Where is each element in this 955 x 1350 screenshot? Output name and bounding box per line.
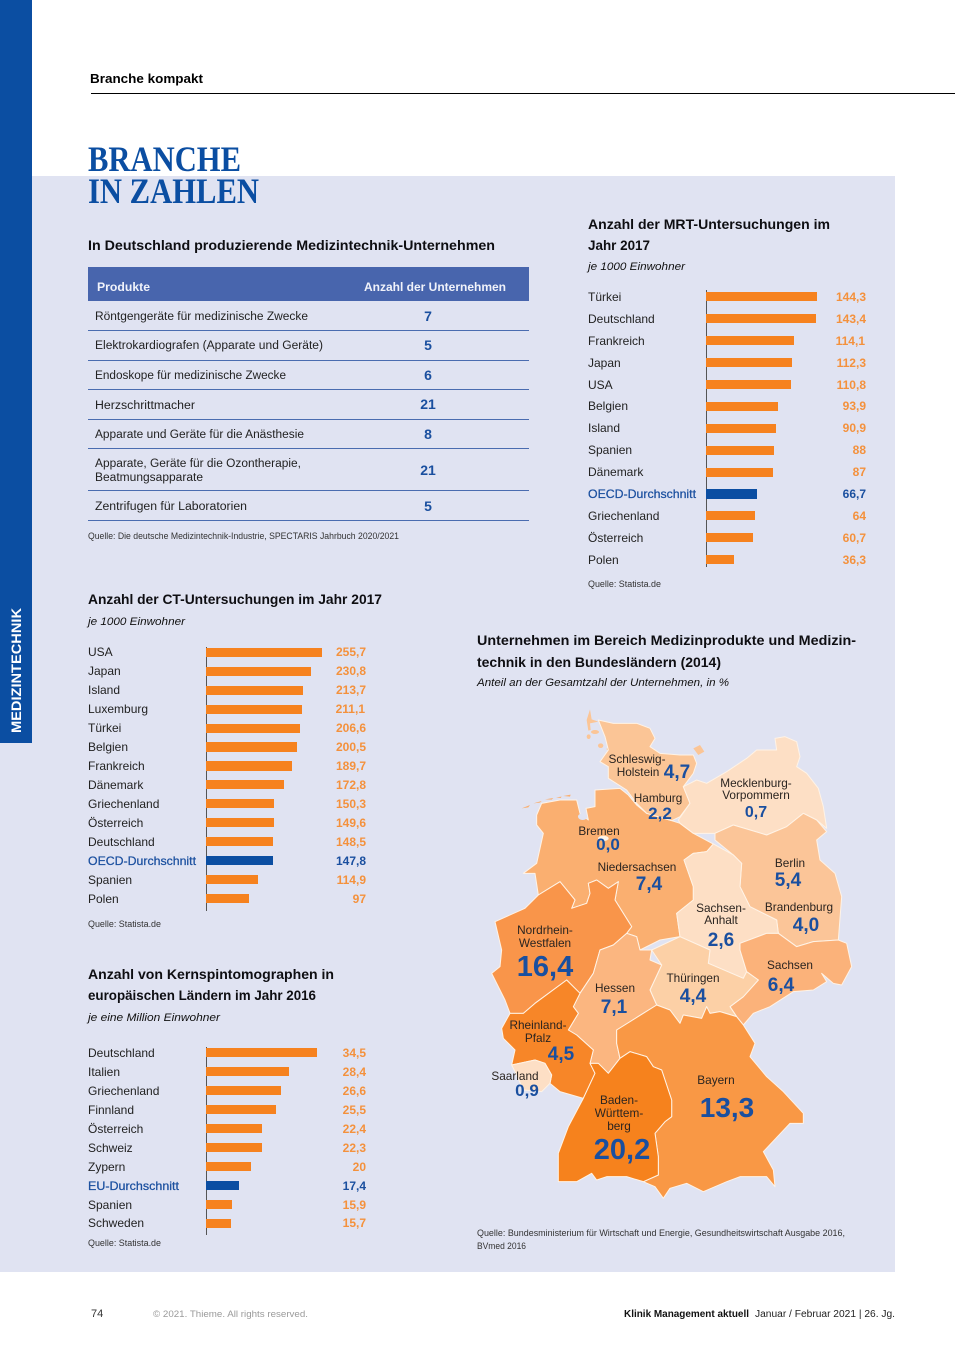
scanners heading: Anzahl von Kernspintomographen in xyxy=(88,966,334,982)
scanners bar chart: Österreich xyxy=(88,1122,143,1136)
MRT bar chart: 114,1 xyxy=(836,334,865,348)
MRT bar chart: OECD-Durchschnitt xyxy=(588,487,697,501)
scanners bar chart: Deutschland xyxy=(88,1046,155,1060)
CT bar chart xyxy=(88,645,366,911)
MRT bar chart xyxy=(588,290,866,567)
region: Nordrhein-Westfalen xyxy=(492,880,632,1013)
CT bar chart: Deutschland xyxy=(88,835,155,849)
MRT bar chart: 144,3 xyxy=(836,290,866,304)
CT bar chart: 172,8 xyxy=(336,778,366,792)
MRT bar chart: 90,9 xyxy=(843,421,866,435)
map labels: 16,4 xyxy=(517,951,573,983)
table header row xyxy=(88,267,529,301)
region: Baden-Württemberg xyxy=(558,1052,672,1182)
table rows: Beatmungsapparate xyxy=(95,472,203,484)
CT bar chart: 211,1 xyxy=(336,702,365,716)
map labels: Württem- xyxy=(595,1106,643,1120)
table rows: 21 xyxy=(420,462,436,478)
region: Rheinland-Pfalz xyxy=(502,980,595,1098)
map subtitle: Anteil an der Gesamtzahl der Unternehmen, in % xyxy=(476,677,729,689)
CT bar chart: 213,7 xyxy=(336,683,366,697)
map labels: 4,5 xyxy=(548,1044,575,1065)
region: Thüringen xyxy=(650,937,758,1023)
map source: Quelle: Bundesministerium für Wirtschaft und Energie, Gesundheitswirtschaft Ausgabe 2016, xyxy=(477,1228,845,1238)
map labels: Bremen xyxy=(578,824,620,838)
map labels: 7,4 xyxy=(636,874,663,895)
map labels: 4,0 xyxy=(793,915,819,936)
scanners heading xyxy=(88,966,334,1003)
title xyxy=(88,139,259,211)
scanners bar chart: 15,7 xyxy=(343,1216,366,1230)
CT bar chart: Island xyxy=(88,683,120,697)
islands xyxy=(522,709,704,808)
table source: Quelle: Die deutsche Medizintechnik-Industrie, SPECTARIS Jahrbuch 2020/2021 xyxy=(88,531,399,541)
CT bar chart: Türkei xyxy=(88,721,121,735)
table header row: Anzahl der Unternehmen xyxy=(364,280,506,294)
footer: Januar / Februar 2021 | 26. Jg. xyxy=(755,1309,895,1320)
MRT bar chart: 64 xyxy=(853,509,866,523)
CT bar chart: 147,8 xyxy=(336,854,366,868)
map labels: Nordrhein- xyxy=(517,923,573,937)
MRT bar chart: 87 xyxy=(853,465,866,479)
MRT bar chart: Polen xyxy=(588,553,619,567)
CT bar chart: 200,5 xyxy=(336,740,366,754)
scanners bar chart: 17,4 xyxy=(343,1179,366,1193)
MRT bar chart: Spanien xyxy=(588,443,632,457)
panel: MRT chart xyxy=(586,216,866,589)
scanners bar chart: 22,4 xyxy=(343,1122,366,1136)
scanners bar chart: EU-Durchschnitt xyxy=(88,1179,180,1193)
footer: 74 xyxy=(91,1308,103,1320)
map labels: Baden- xyxy=(600,1093,638,1107)
table heading: In Deutschland produzierende Medizintechnik-Unternehmen xyxy=(88,237,495,253)
MRT bar chart: Belgien xyxy=(588,399,628,413)
title: IN ZAHLEN xyxy=(88,171,259,211)
scanners bar chart: 15,9 xyxy=(343,1198,366,1212)
MRT bar chart: Japan xyxy=(588,356,621,370)
table rows: Endoskope für medizinische Zwecke xyxy=(95,370,286,382)
MRT heading: Anzahl der MRT-Untersuchungen im xyxy=(588,216,830,232)
map labels: 2,6 xyxy=(708,930,734,951)
map labels: 20,2 xyxy=(594,1134,650,1166)
map labels: 5,4 xyxy=(775,870,802,891)
region: Sachsen-Anhalt xyxy=(677,844,778,978)
scanners bar chart: 20 xyxy=(353,1160,366,1174)
map labels: Vorpommern xyxy=(722,788,790,802)
MRT bar chart: 112,3 xyxy=(837,356,866,370)
title: BRANCHE xyxy=(88,139,241,179)
map labels: Sachsen xyxy=(767,958,813,972)
background panel xyxy=(0,176,895,1272)
map labels: Anhalt xyxy=(704,913,738,927)
table rows: Zentrifugen für Laboratorien xyxy=(95,501,247,513)
region: Sachsen xyxy=(730,933,852,1025)
map labels: Saarland xyxy=(491,1069,539,1083)
panel: manufacturers table xyxy=(88,237,529,541)
panel: CT chart xyxy=(86,591,382,929)
scanners source: Quelle: Statista.de xyxy=(88,1238,161,1248)
MRT bar chart: 143,4 xyxy=(836,312,866,326)
map labels: berg xyxy=(607,1119,631,1133)
CT bar chart: 149,6 xyxy=(336,816,366,830)
MRT bar chart: Island xyxy=(588,421,620,435)
CT bar chart: Belgien xyxy=(88,740,128,754)
CT bar chart: Dänemark xyxy=(88,778,144,792)
map labels xyxy=(491,752,833,1166)
MRT bar chart: Türkei xyxy=(588,290,621,304)
CT bar chart: Frankreich xyxy=(88,759,145,773)
map labels: Hamburg xyxy=(634,791,682,805)
MRT bar chart: Dänemark xyxy=(588,465,644,479)
CT heading: Anzahl der CT-Untersuchungen im Jahr 2017 xyxy=(88,591,382,607)
table rows: Apparate, Geräte für die Ozontherapie, xyxy=(95,458,301,470)
map source: BVmed 2016 xyxy=(477,1241,526,1251)
map labels: Holstein xyxy=(617,765,659,779)
CT bar chart: 114,9 xyxy=(337,873,366,887)
MRT bar chart: 88 xyxy=(853,443,866,457)
map labels: Schleswig- xyxy=(608,752,666,766)
map labels: 4,4 xyxy=(680,986,707,1007)
scanners bar chart: Schweiz xyxy=(88,1141,133,1155)
CT subtitle: je 1000 Einwohner xyxy=(86,616,186,628)
CT bar chart: Luxemburg xyxy=(88,702,148,716)
scanners bar chart: Spanien xyxy=(88,1198,132,1212)
scanners bar chart xyxy=(88,1046,366,1235)
CT bar chart: Japan xyxy=(88,664,121,678)
region: Saarland xyxy=(512,1060,552,1092)
sidebar: Medizintechnik xyxy=(0,0,32,743)
MRT bar chart: 110,8 xyxy=(837,378,866,392)
scanners bar chart: Griechenland xyxy=(88,1084,159,1098)
CT bar chart: OECD-Durchschnitt xyxy=(88,854,197,868)
map source xyxy=(477,1228,845,1251)
MRT heading xyxy=(588,216,830,253)
MRT bar chart: Österreich xyxy=(588,531,643,545)
MRT bar chart: 66,7 xyxy=(843,487,866,501)
map heading xyxy=(477,632,856,670)
map labels: Pfalz xyxy=(525,1031,551,1045)
CT source: Quelle: Statista.de xyxy=(88,919,161,929)
region: Schleswig-Holstein xyxy=(598,720,697,821)
CT bar chart: 206,6 xyxy=(336,721,366,735)
choropleth map of Germany xyxy=(492,709,852,1198)
scanners heading: europäischen Ländern im Jahr 2016 xyxy=(88,987,316,1003)
water spots xyxy=(578,813,587,820)
table rows: 8 xyxy=(424,426,432,442)
region: Bayern xyxy=(617,1005,803,1198)
section header: Branche kompakt: Branche kompakt xyxy=(90,71,204,86)
CT bar chart: 97 xyxy=(353,892,366,906)
region: Mecklenburg-Vorpommern xyxy=(678,737,827,835)
map labels: 2,2 xyxy=(648,804,672,823)
scanners bar chart: Italien xyxy=(88,1065,120,1079)
map labels: Niedersachsen xyxy=(598,860,676,874)
map labels: Thüringen xyxy=(666,971,720,985)
table rows: 7 xyxy=(424,308,432,324)
MRT source: Quelle: Statista.de xyxy=(588,579,661,589)
MRT subtitle: je 1000 Einwohner xyxy=(586,261,686,273)
CT bar chart: Spanien xyxy=(88,873,132,887)
MRT heading: Jahr 2017 xyxy=(588,237,650,253)
panel: MR scanners chart xyxy=(86,966,366,1248)
map labels: 0,7 xyxy=(745,804,767,821)
table rows: 6 xyxy=(424,367,432,383)
scanners bar chart: Schweden xyxy=(88,1216,144,1230)
map heading: technik in den Bundesländern (2014) xyxy=(477,654,721,670)
map labels: Mecklenburg- xyxy=(720,776,792,790)
map heading: Unternehmen im Bereich Medizinprodukte und Medizin- xyxy=(477,632,856,648)
CT bar chart: 150,3 xyxy=(336,797,366,811)
map labels: Sachsen- xyxy=(696,901,746,915)
region: Niedersachsen xyxy=(523,788,713,950)
table rows: Apparate und Geräte für die Anästhesie xyxy=(95,429,304,441)
scanners bar chart: 25,5 xyxy=(343,1103,366,1117)
scanners bar chart: 34,5 xyxy=(343,1046,366,1060)
scanners bar chart: Zypern xyxy=(88,1160,125,1174)
map labels: Westfalen xyxy=(519,936,571,950)
CT bar chart: 148,5 xyxy=(336,835,366,849)
table header row: Produkte xyxy=(97,280,150,294)
MRT bar chart: Deutschland xyxy=(588,312,655,326)
table rows: 5 xyxy=(424,337,432,353)
scanners bar chart: 26,6 xyxy=(343,1084,366,1098)
map labels: Bayern xyxy=(697,1073,735,1087)
MRT bar chart: 93,9 xyxy=(843,399,866,413)
map labels: 4,7 xyxy=(664,762,690,783)
CT bar chart: 230,8 xyxy=(336,664,366,678)
table rows xyxy=(88,308,529,520)
MRT bar chart: USA xyxy=(588,378,613,392)
region: Brandenburg and Berlin xyxy=(715,813,842,947)
map labels: Rheinland- xyxy=(509,1018,567,1032)
MRT bar chart: Frankreich xyxy=(588,334,645,348)
CT bar chart: Österreich xyxy=(88,816,143,830)
map labels: Berlin xyxy=(775,856,805,870)
table rows: Herzschrittmacher xyxy=(95,400,195,412)
footer: Klinik Management aktuell xyxy=(624,1309,749,1320)
CT bar chart: 189,7 xyxy=(336,759,366,773)
CT bar chart: Griechenland xyxy=(88,797,159,811)
MRT bar chart: Griechenland xyxy=(588,509,659,523)
map labels: 0,0 xyxy=(596,835,620,854)
table rows: 21 xyxy=(420,396,436,412)
MRT bar chart: 36,3 xyxy=(843,553,866,567)
footer: © 2021. Thieme. All rights reserved. xyxy=(153,1309,308,1320)
map labels: 13,3 xyxy=(700,1092,754,1123)
panel: Germany map section xyxy=(476,632,856,1251)
map labels: 0,9 xyxy=(515,1081,539,1100)
scanners bar chart: Finnland xyxy=(88,1103,134,1117)
map labels: 7,1 xyxy=(601,997,628,1018)
table rows: Röntgengeräte für medizinische Zwecke xyxy=(95,311,308,323)
footer xyxy=(91,1308,895,1320)
table rows: Elektrokardiografen (Apparate und Geräte) xyxy=(95,340,323,352)
CT bar chart: Polen xyxy=(88,892,119,906)
sidebar: Medizintechnik: MEDIZINTECHNIK xyxy=(8,608,24,733)
scanners bar chart: 28,4 xyxy=(343,1065,366,1079)
map labels: Hessen xyxy=(595,981,635,995)
table rows: 5 xyxy=(424,498,432,514)
CT bar chart: USA xyxy=(88,645,113,659)
scanners subtitle: je eine Million Einwohner xyxy=(86,1012,221,1024)
region: Hessen xyxy=(568,933,662,1073)
MRT bar chart: 60,7 xyxy=(843,531,866,545)
scanners bar chart: 22,3 xyxy=(343,1141,366,1155)
CT bar chart: 255,7 xyxy=(336,645,366,659)
map labels: 6,4 xyxy=(768,975,795,996)
map labels: Brandenburg xyxy=(765,900,833,914)
